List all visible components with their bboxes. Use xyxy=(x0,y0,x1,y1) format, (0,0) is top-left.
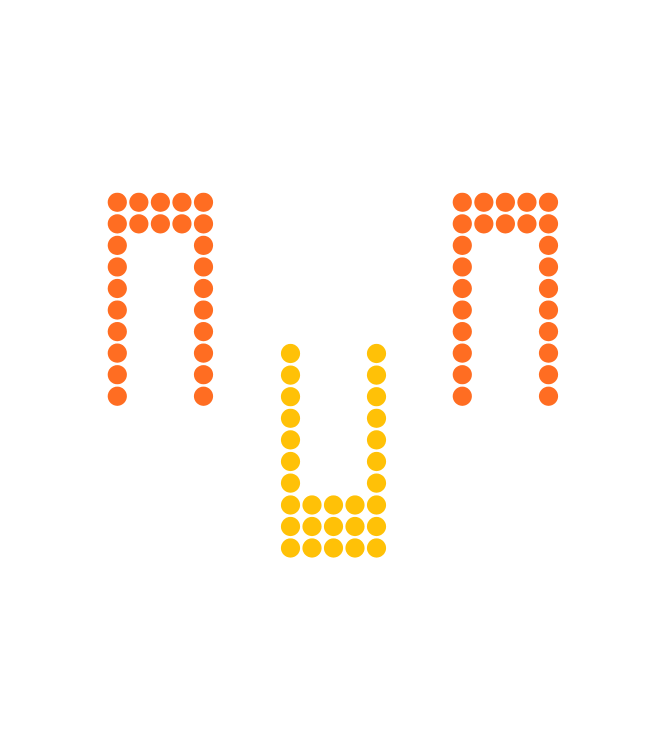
right orange dot shape xyxy=(453,193,558,406)
left orange dot shape xyxy=(108,193,213,406)
center yellow dot shape xyxy=(281,344,386,558)
